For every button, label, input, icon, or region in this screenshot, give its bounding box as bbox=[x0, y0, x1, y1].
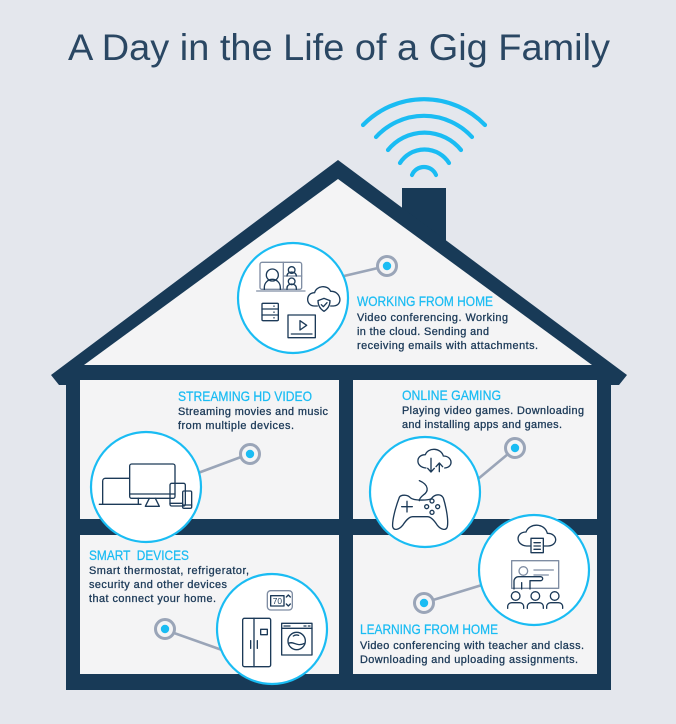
heading: LEARNING FROM HOME bbox=[360, 621, 498, 637]
text block: Playing video games. Downloading bbox=[402, 405, 584, 417]
text block: in the cloud. Sending and bbox=[357, 326, 489, 338]
section: learning from home bbox=[360, 515, 589, 666]
icon: thermostat, refrigerator, washer bbox=[243, 591, 312, 667]
text block bbox=[402, 405, 584, 431]
icon circle bbox=[238, 243, 348, 353]
icon circle bbox=[91, 432, 201, 542]
connector and dot bbox=[198, 444, 260, 473]
icon: video conference, cloud, server, video bbox=[257, 262, 340, 338]
text block: Streaming movies and music bbox=[178, 406, 329, 418]
text block bbox=[178, 406, 329, 432]
panel: streaming room bbox=[80, 380, 339, 519]
icon: thermostat, refrigerator, washer: 70 bbox=[273, 596, 282, 606]
heading: STREAMING HD VIDEO bbox=[178, 388, 312, 404]
text block bbox=[89, 565, 249, 605]
heading: WORKING FROM HOME bbox=[357, 293, 493, 309]
text block: Video conferencing with teacher and class. bbox=[360, 640, 584, 652]
icon circle bbox=[217, 574, 327, 684]
text block: from multiple devices. bbox=[178, 420, 294, 432]
text block: Video conferencing. Working bbox=[357, 312, 508, 324]
house structure bbox=[51, 160, 627, 690]
text block: receiving emails with attachments. bbox=[357, 340, 538, 352]
connector and dot bbox=[156, 620, 222, 650]
connector and dot bbox=[344, 256, 396, 276]
text block bbox=[357, 312, 538, 352]
heading: SMART DEVICES bbox=[89, 547, 189, 563]
section: working from home bbox=[238, 243, 538, 353]
panel: smart devices room bbox=[80, 535, 339, 674]
heading: ONLINE GAMING bbox=[402, 387, 501, 403]
title: A Day in the Life of a Gig Family bbox=[68, 27, 611, 68]
icon circle bbox=[479, 515, 589, 625]
text block bbox=[360, 640, 584, 666]
icon: cloud document and classroom bbox=[508, 525, 563, 608]
section: streaming hd video bbox=[91, 388, 329, 542]
connector and dot bbox=[414, 585, 482, 612]
section: smart devices bbox=[89, 547, 327, 684]
text block: Downloading and uploading assignments. bbox=[360, 654, 578, 666]
icon circle bbox=[370, 437, 480, 547]
panel: gaming room bbox=[353, 380, 597, 519]
icon: cloud and game controller bbox=[393, 449, 451, 529]
section: online gaming bbox=[370, 387, 584, 547]
connector and dot bbox=[478, 438, 524, 479]
text block: security and other devices bbox=[89, 579, 228, 591]
text block: and installing apps and games. bbox=[402, 419, 562, 431]
text block: that connect your home. bbox=[89, 593, 216, 605]
icon: laptop, monitor, tablet, phone bbox=[99, 464, 192, 508]
icon: wifi signal bbox=[363, 99, 485, 175]
panel: learning room bbox=[353, 535, 597, 674]
text block: Smart thermostat, refrigerator, bbox=[89, 565, 249, 577]
